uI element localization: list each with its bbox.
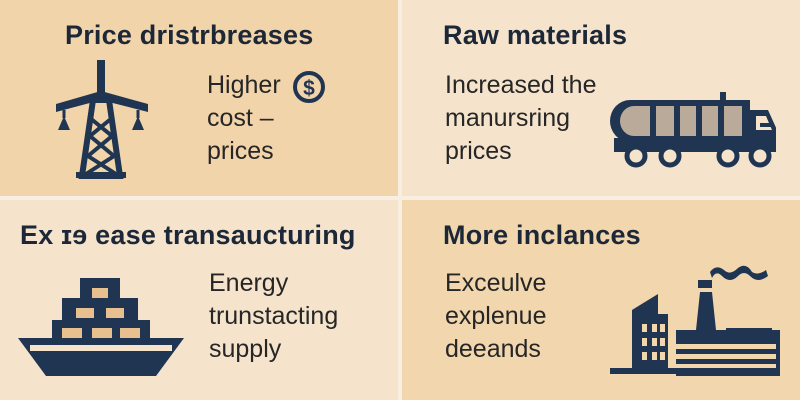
- text: exceulve: Exceulve: [445, 269, 546, 297]
- text: increased: manursring: [445, 104, 570, 132]
- icon: dollar: $: [303, 77, 315, 100]
- text: energy: [209, 269, 338, 363]
- text: increased: prices: [445, 137, 512, 165]
- icon: truck: [610, 92, 776, 168]
- text: energy: Energy: [209, 269, 288, 297]
- text: higher cost: prices: [207, 137, 274, 165]
- icon: dollar: [293, 71, 325, 103]
- text: energy: trunstacting: [209, 302, 338, 330]
- text: exceulve: deeands: [445, 335, 541, 363]
- text: higher cost: [207, 71, 281, 165]
- panel: more: [402, 200, 800, 400]
- panel: raw materials: [402, 0, 800, 196]
- text: energy: supply: [209, 335, 281, 363]
- text: higher cost: cost –: [207, 104, 274, 132]
- heading: more: More inclances: [443, 220, 641, 250]
- icon: tower: [56, 60, 148, 179]
- icon: ship: [18, 278, 184, 376]
- heading: raw: Raw materials: [443, 20, 627, 50]
- text: increased: [445, 71, 596, 165]
- text: exceulve: [445, 269, 546, 363]
- panel: price: [0, 0, 398, 196]
- heading: transaction: Ex ɪɘ ease transaucturing: [20, 220, 356, 250]
- text: increased: Increased the: [445, 71, 596, 99]
- heading: price: Price dristrbreases: [65, 20, 313, 50]
- icon: factory: [610, 266, 780, 376]
- text: higher cost: Higher: [207, 71, 281, 99]
- panel: transaction: [0, 200, 398, 400]
- text: exceulve: explenue: [445, 302, 546, 330]
